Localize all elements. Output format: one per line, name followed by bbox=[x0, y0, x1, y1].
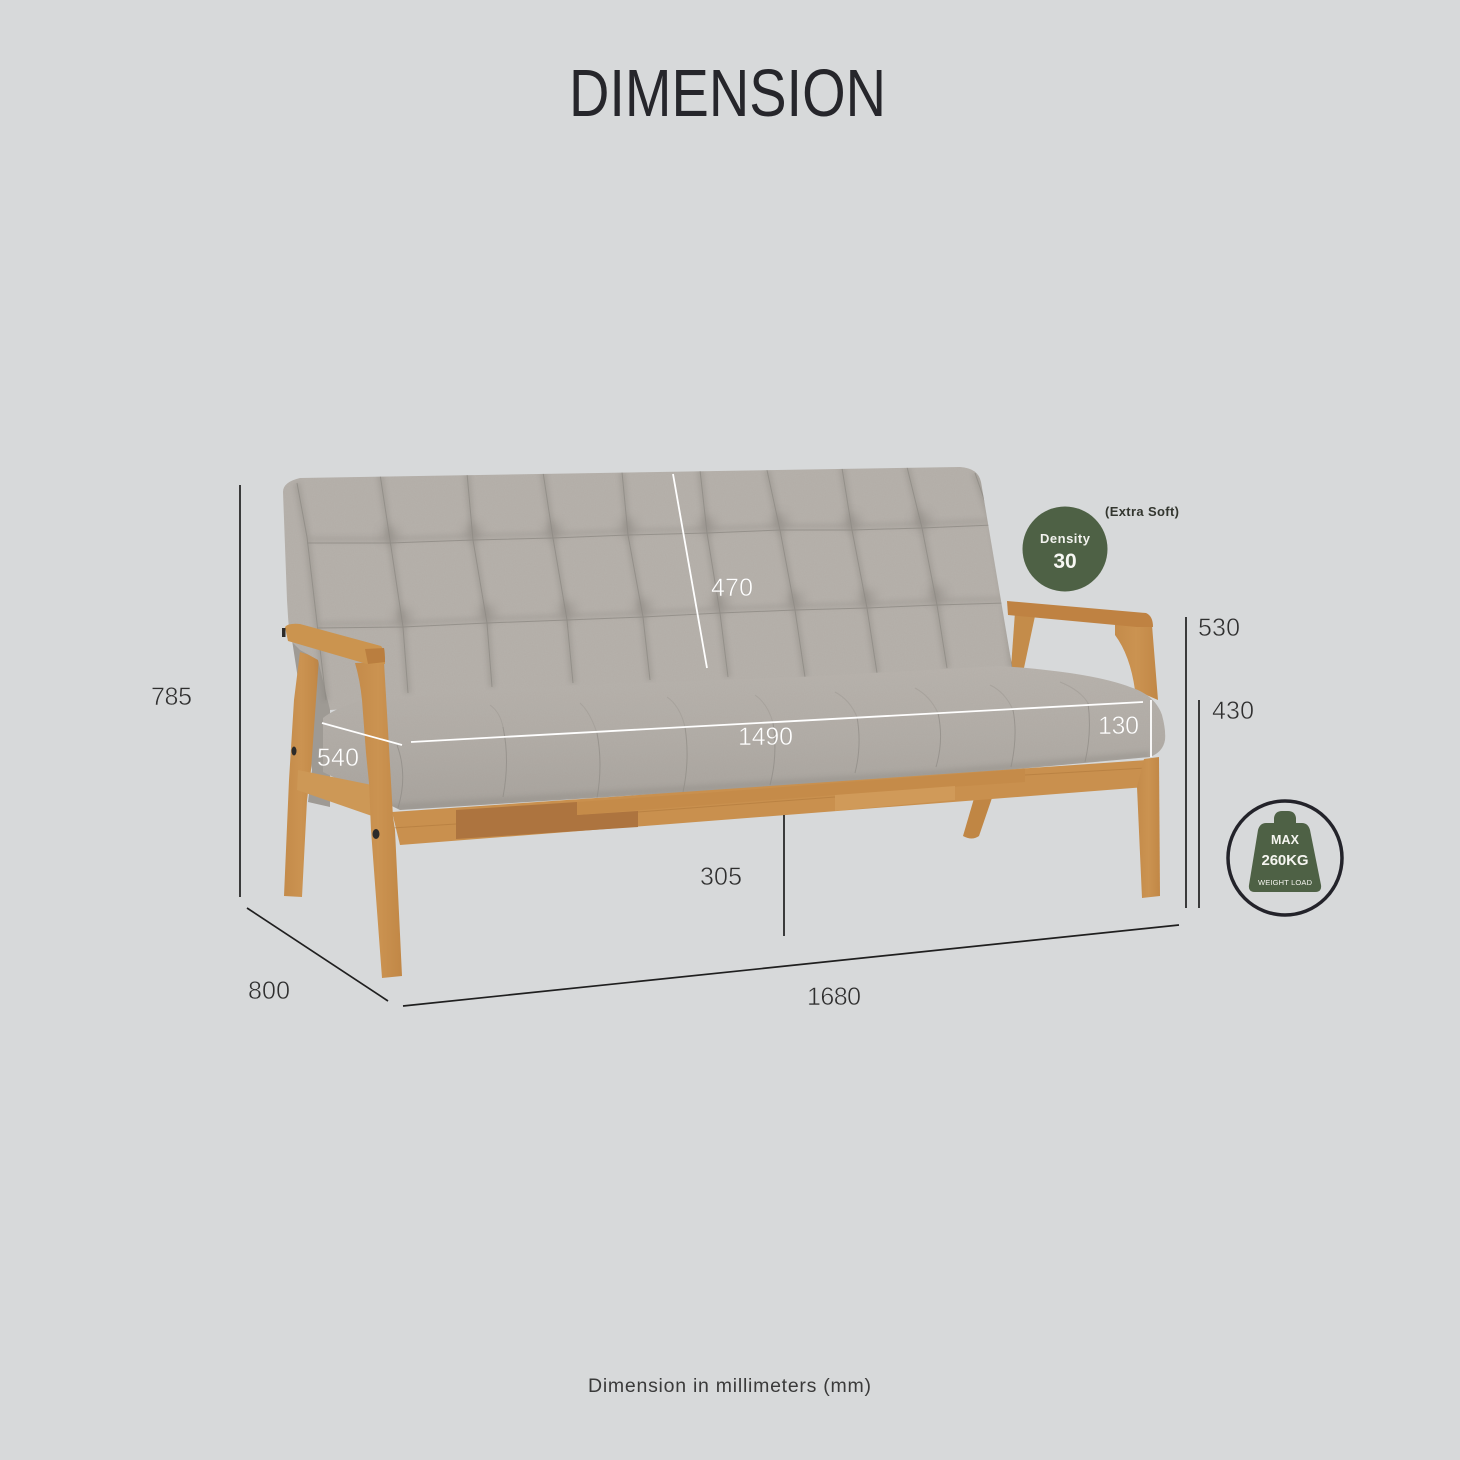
weight load icon: WEIGHT LOAD bbox=[1258, 878, 1313, 887]
density note: (Extra Soft) bbox=[1105, 504, 1179, 519]
rear right arm support bbox=[1011, 612, 1035, 668]
dimension: 1680 overall width: 1680 bbox=[807, 983, 861, 1011]
footnote: Dimension in millimeters (mm) bbox=[588, 1375, 871, 1397]
right armrest bbox=[1007, 601, 1153, 627]
weight load icon bbox=[1228, 801, 1342, 915]
dimension: 305 clearance: 305 bbox=[700, 863, 742, 891]
left armrest bbox=[285, 624, 385, 664]
density badge bbox=[1022, 506, 1108, 592]
dimension: 1680 overall width bbox=[403, 925, 1179, 1011]
seat cushion bbox=[323, 666, 1165, 810]
back cushion bbox=[283, 467, 1013, 710]
front left leg bbox=[355, 662, 402, 978]
soft shadow seams bbox=[297, 467, 1012, 700]
title: DIMENSION bbox=[569, 56, 886, 131]
dimension: 800 overall depth: 800 bbox=[248, 977, 290, 1005]
rear right leg bbox=[963, 795, 993, 838]
white dimension: 540 seat depth: 540 bbox=[317, 744, 359, 772]
bolts bbox=[282, 628, 380, 839]
fabric side panel at left bbox=[292, 640, 330, 807]
dimension: 800 overall depth bbox=[247, 908, 388, 1005]
white dimension: 1490 seat width bbox=[411, 702, 1143, 751]
density badge: 30 bbox=[1053, 550, 1077, 573]
white dimension: 1490 seat width: 1490 bbox=[738, 723, 793, 751]
dimension: 530 arm height: 530 bbox=[1198, 614, 1240, 642]
density badge: Density bbox=[1040, 531, 1091, 546]
front rail bbox=[392, 760, 1147, 845]
left side rail bbox=[297, 770, 372, 816]
sofa illustration bbox=[282, 467, 1165, 978]
right arm post bbox=[1115, 625, 1158, 700]
white dimension: 540 seat depth bbox=[317, 723, 402, 772]
white dimension: 130 cushion thickness bbox=[1098, 700, 1151, 757]
rear left leg bbox=[284, 652, 319, 897]
weight load icon: 260KG bbox=[1262, 852, 1308, 869]
white dimension: 470 back height bbox=[673, 474, 753, 668]
white dimension: 130 cushion thickness: 130 bbox=[1098, 712, 1139, 740]
dimension: 785 overall height: 785 bbox=[151, 683, 192, 711]
right front leg bbox=[1137, 757, 1160, 898]
dimension: 305 clearance bbox=[700, 815, 784, 936]
white dimension: 470 back height: 470 bbox=[711, 574, 753, 602]
weight load icon: MAX bbox=[1271, 833, 1300, 847]
dimension: 430 seat height: 430 bbox=[1212, 697, 1254, 725]
